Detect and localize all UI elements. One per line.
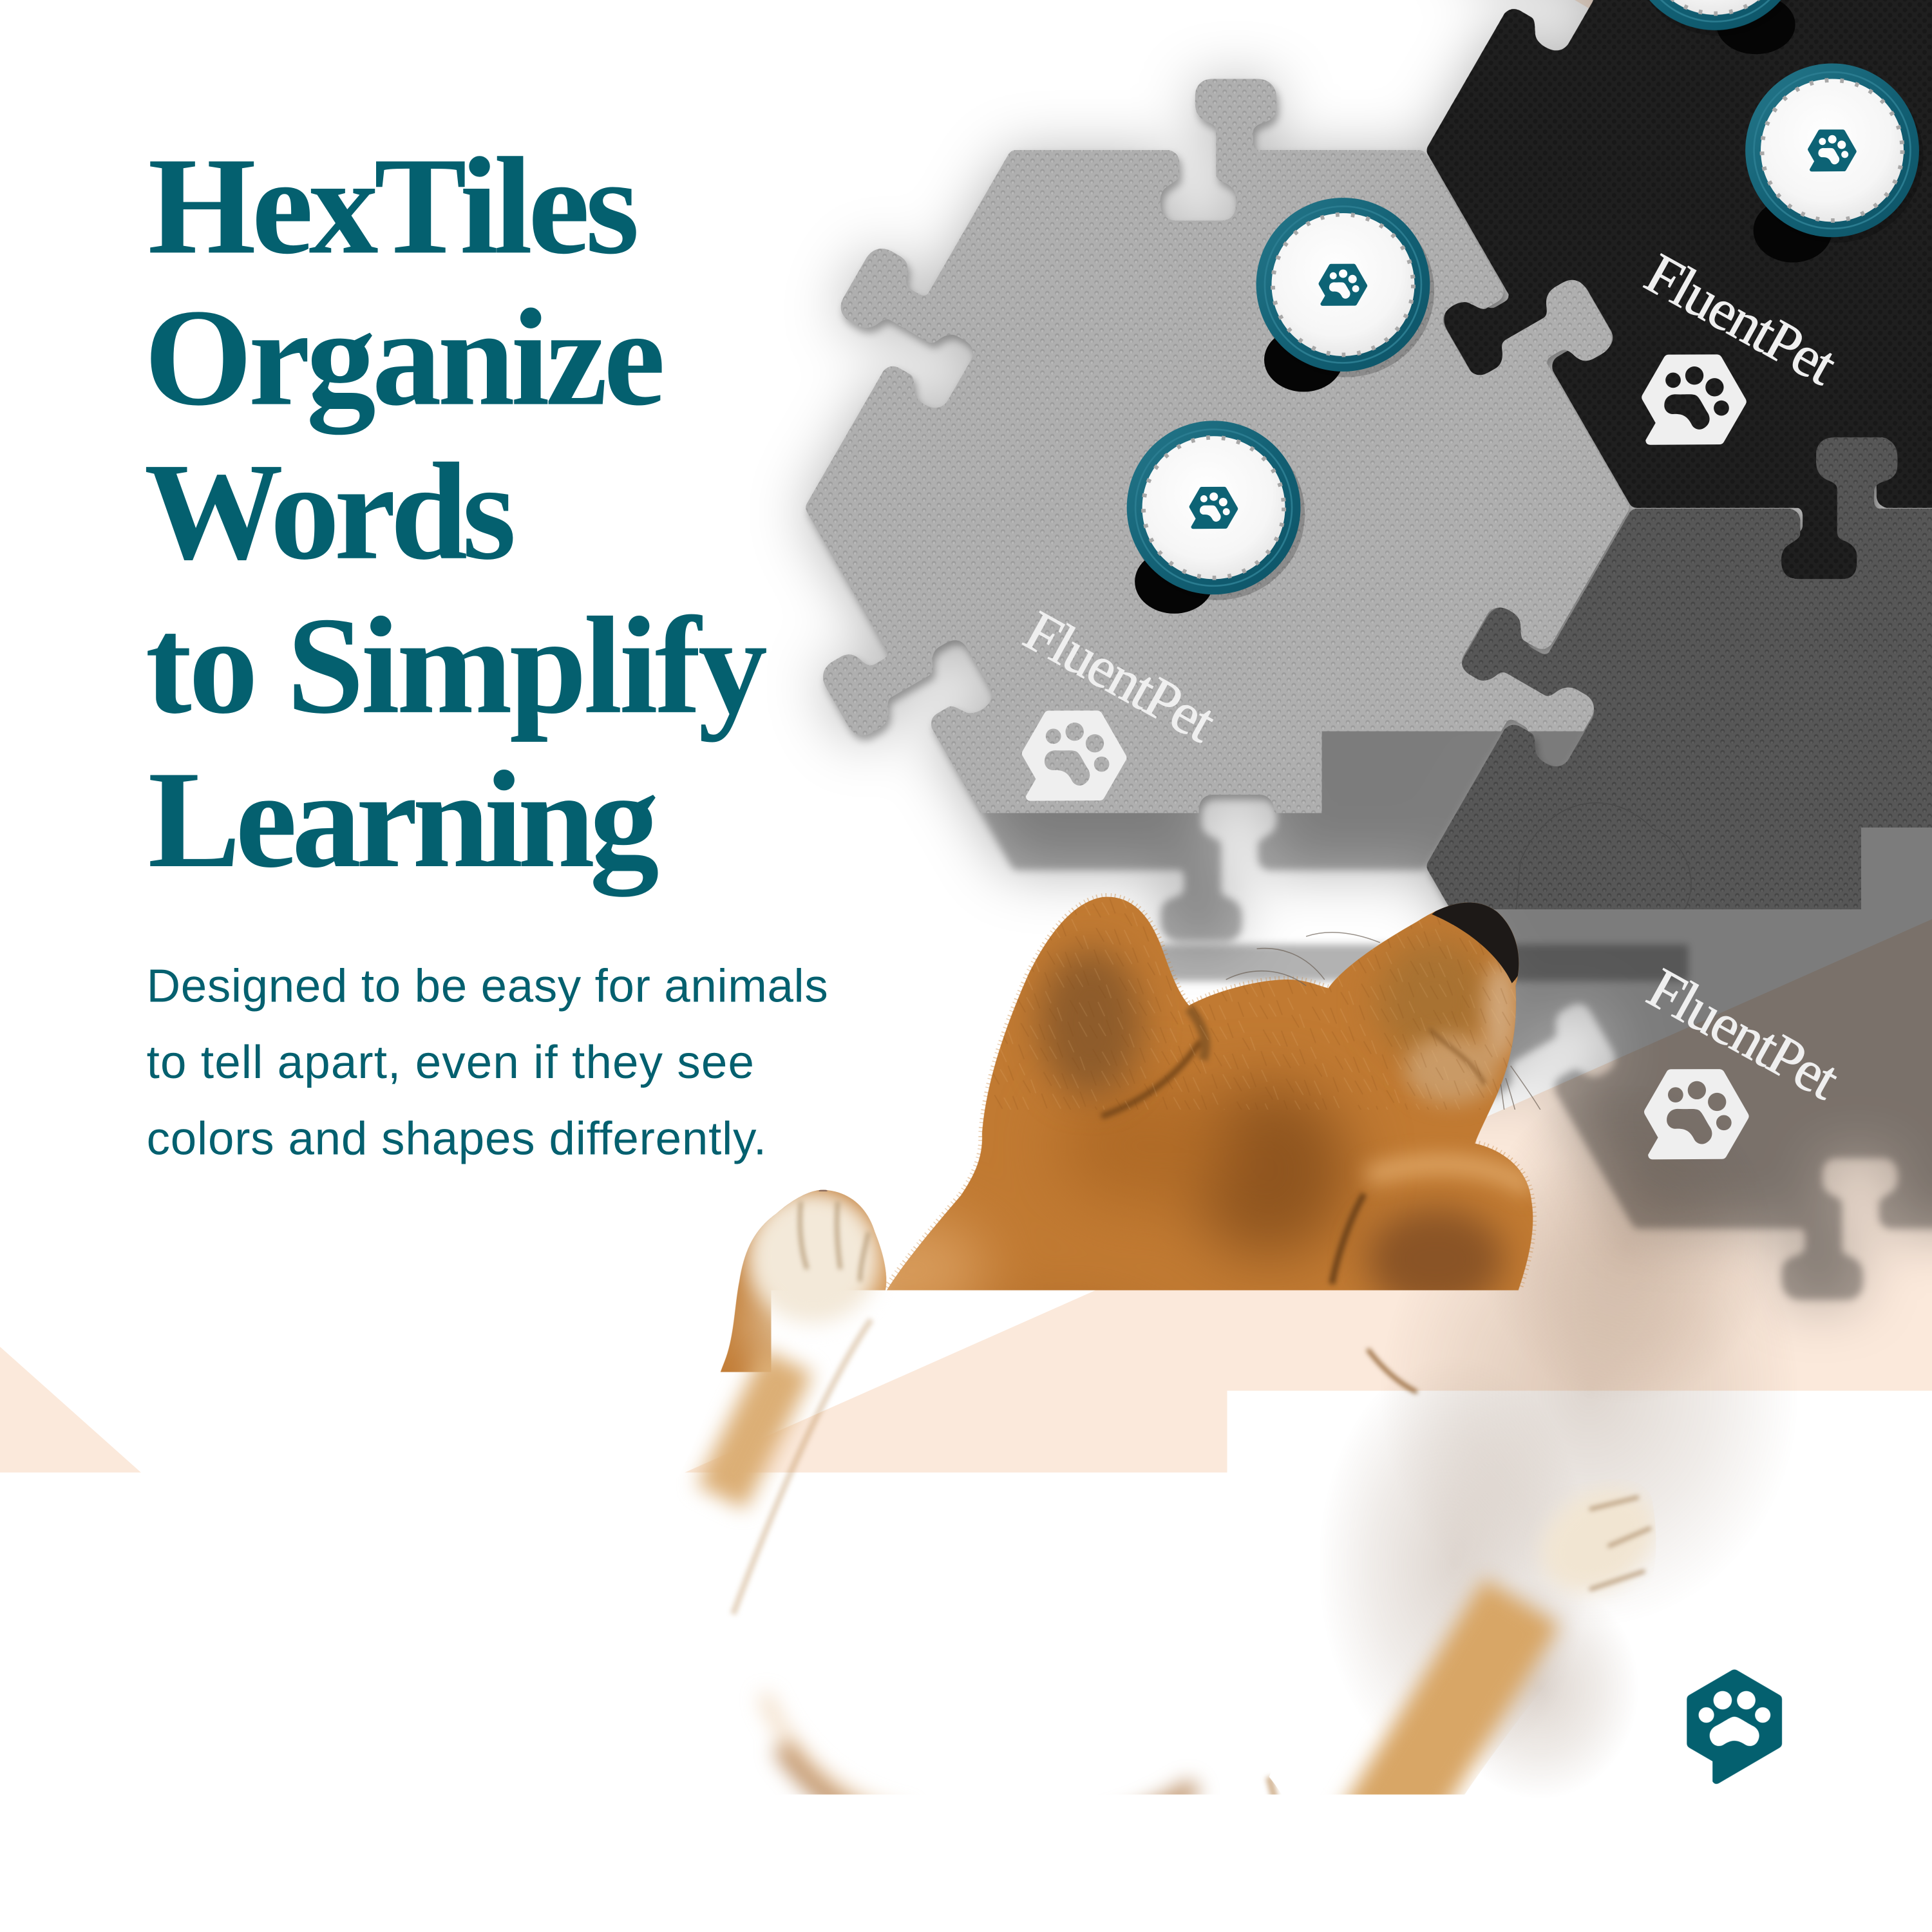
tile: light gray hexagon [749,39,1685,976]
note: buttons not included: Buttons not included [148,1308,579,1358]
description text: Designed to be easy for animals [147,960,828,1012]
title: Words [144,434,516,589]
tile mark outline: dark tile [1515,803,1691,961]
icon: FluentPet paw logo [1687,1669,1782,1784]
tile branding: dark tile [1625,956,1850,1191]
title: to Simplify [146,588,768,743]
dog whiskers [1226,933,1555,1171]
tile branding: light tile [1003,599,1226,833]
creases and toe lines [733,1008,1651,1932]
broad fur shading [468,1084,1593,1928]
tile branding: black tile [1622,242,1847,477]
tile: black hexagon [1370,0,1932,618]
toe nails [761,1186,1656,1575]
dog fur edge [459,897,1561,1929]
shiba inu dog [419,862,1700,1932]
buttons [1127,0,1928,961]
ear and muzzle shading [1039,939,1504,1311]
dog nose [1432,898,1524,983]
tile: dark gray hexagon [1370,398,1932,1334]
button bases: black stems [1135,0,1832,972]
title: HexTiles [148,128,639,283]
dog body and head fur [419,862,1700,1932]
tile branding: black tile: FluentPet [1635,242,1847,397]
fur texture [419,862,1700,1932]
title: Organize [144,280,665,435]
tile branding: dark tile: FluentPet [1638,956,1850,1112]
description text: colors and shapes differently. [147,1113,766,1165]
medium fur detail [721,961,1676,1910]
title [144,128,768,897]
tile branding: light tile: FluentPet [1014,599,1226,755]
description text [147,960,828,1165]
soft shadows beneath tiles and dog [749,0,1932,1799]
description text: to tell apart, even if they see [147,1036,754,1088]
title: Learning [148,742,659,897]
